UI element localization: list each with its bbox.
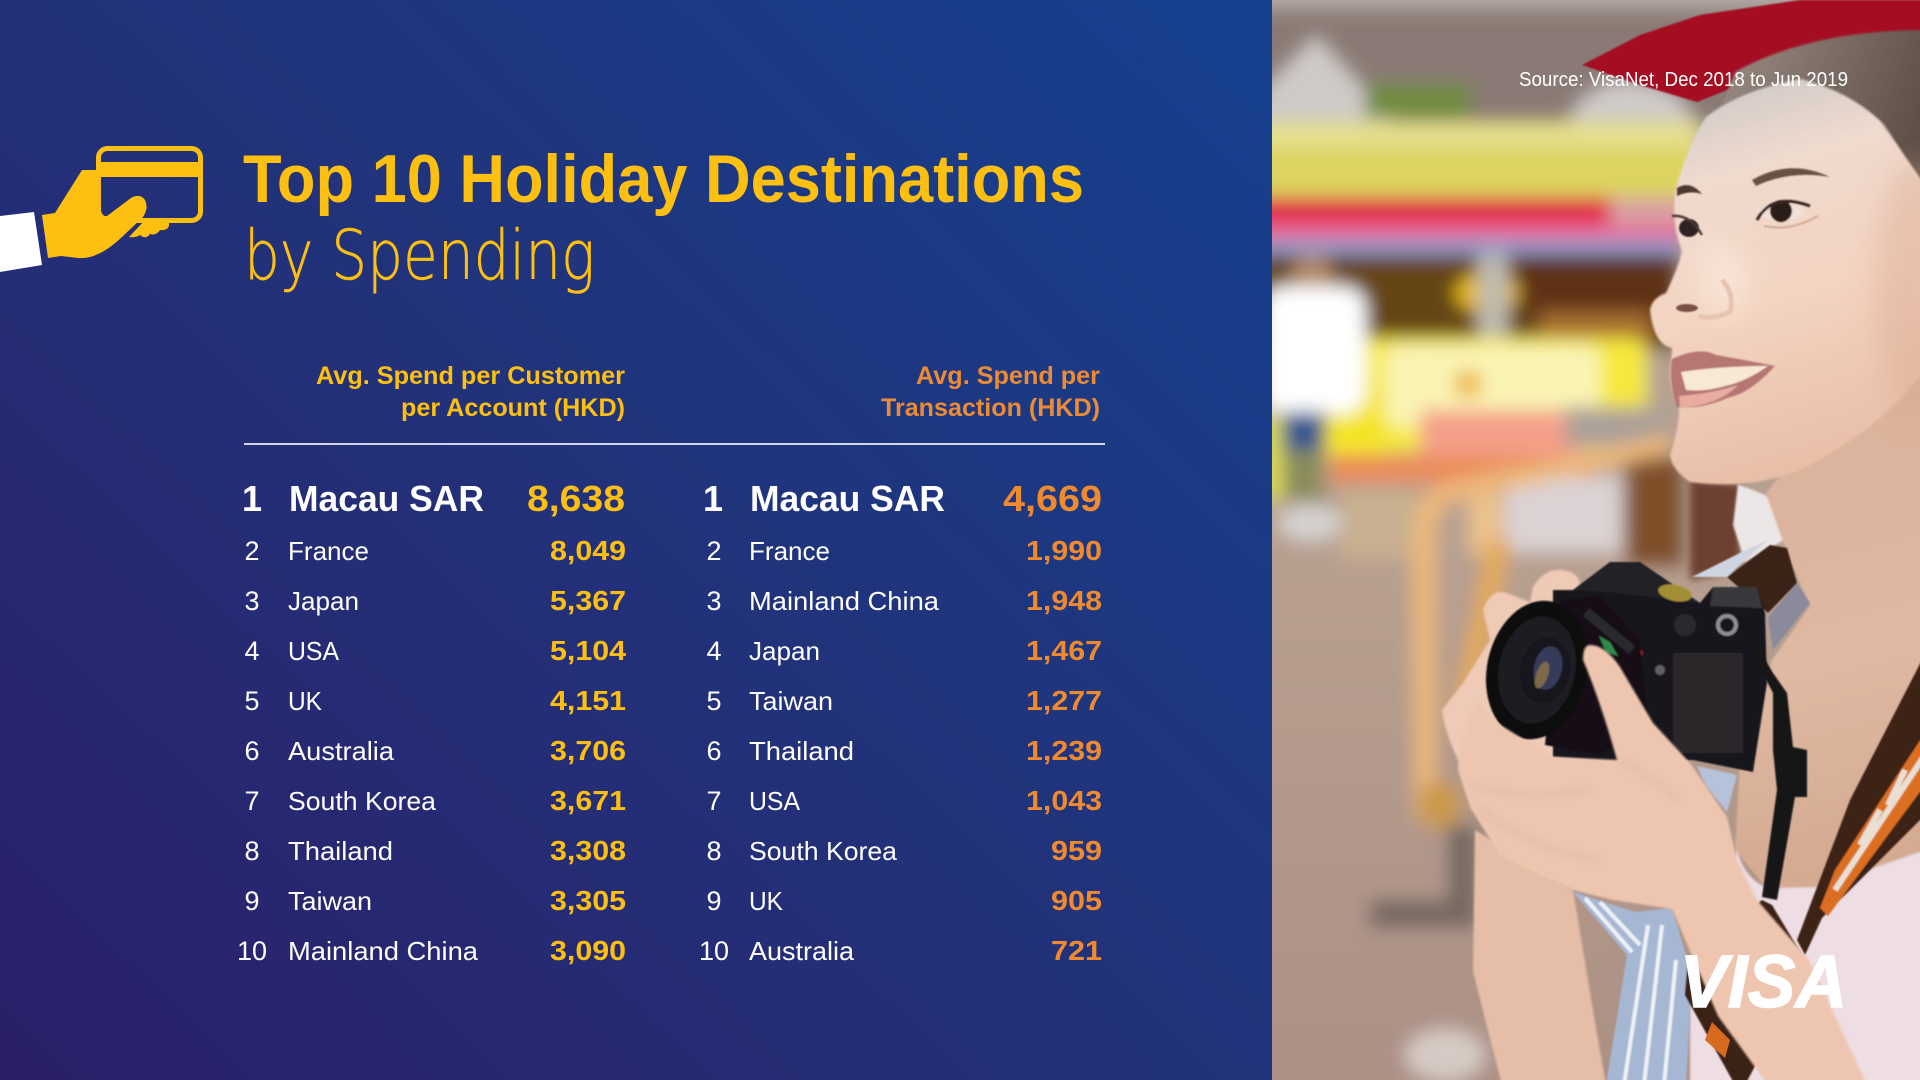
row 2 bbox=[244, 535, 626, 566]
row 2: France bbox=[749, 536, 830, 566]
row 2: 1,990 bbox=[1026, 535, 1102, 566]
row 9: 905 bbox=[1051, 885, 1102, 916]
row 1 bbox=[703, 478, 1102, 519]
photo: barrier and sign bbox=[1565, 407, 1665, 447]
photo: neck and chest bbox=[1734, 376, 1920, 888]
panel: blue gradient background bbox=[0, 0, 1272, 1080]
row 1: Macau SAR bbox=[289, 478, 484, 519]
row 5: 5 bbox=[244, 686, 260, 716]
row 1 bbox=[242, 478, 625, 519]
icon: fingers under card bbox=[129, 218, 169, 237]
row 8: 959 bbox=[1051, 835, 1102, 866]
row 9: 9 bbox=[706, 886, 722, 916]
row 4: 1,467 bbox=[1026, 635, 1102, 666]
row 8 bbox=[244, 835, 626, 866]
panel: photo of woman with camera bbox=[1230, 0, 1920, 1080]
photo: black camera strap bbox=[1761, 658, 1808, 901]
row 7 bbox=[706, 785, 1102, 816]
row 6 bbox=[244, 735, 626, 766]
photo: blurred market background bbox=[1230, 0, 1920, 1080]
photo: striped scarf lower bbox=[1573, 892, 1692, 1080]
photo: white top bbox=[1690, 850, 1920, 1080]
row 6: 6 bbox=[706, 736, 722, 766]
row 6: 6 bbox=[244, 736, 260, 766]
photo: scarf under camera bbox=[1697, 766, 1737, 812]
row 5: 5 bbox=[706, 686, 722, 716]
row 4: Japan bbox=[749, 636, 820, 666]
logo: VISA: VISA bbox=[1680, 940, 1847, 1023]
row 7: 1,043 bbox=[1026, 785, 1102, 816]
row 5: Taiwan bbox=[749, 686, 833, 716]
photo: camera bbox=[1474, 562, 1767, 772]
row 1: Macau SAR bbox=[750, 478, 945, 519]
row 2: 2 bbox=[244, 536, 260, 566]
row 3: 5,367 bbox=[550, 585, 626, 616]
row 3: 3 bbox=[706, 586, 722, 616]
row 1: 8,638 bbox=[527, 478, 625, 519]
camera grip bbox=[1673, 653, 1743, 753]
row 10: Mainland China bbox=[288, 936, 479, 966]
camera body bbox=[1553, 562, 1767, 772]
row 10: 10 bbox=[237, 936, 267, 966]
icon: hand holding credit card bbox=[0, 148, 202, 272]
photo: dark stall interior bbox=[1230, 255, 1680, 350]
row 4 bbox=[244, 635, 626, 666]
photo: scarf highlight behind chin bbox=[1733, 484, 1784, 562]
row 3: Japan bbox=[288, 586, 359, 616]
row 9: 3,305 bbox=[550, 885, 626, 916]
title line: light: by Spending bbox=[244, 216, 595, 296]
row 4: 4 bbox=[244, 636, 260, 666]
row 6: 3,706 bbox=[550, 735, 626, 766]
row 9 bbox=[244, 885, 626, 916]
photo: facial features bbox=[1671, 160, 1920, 420]
row 10: Australia bbox=[749, 936, 855, 966]
row 1: 1 bbox=[703, 478, 723, 519]
row 10: 721 bbox=[1051, 935, 1102, 966]
photo: front hand and right forearm bbox=[1458, 645, 1867, 1080]
row 3: 3 bbox=[244, 586, 260, 616]
photo: hand creases bbox=[1470, 760, 1680, 860]
column heading: transaction spend: Transaction (HKD) bbox=[881, 394, 1100, 422]
row 8: 8 bbox=[706, 836, 722, 866]
row 8: Thailand bbox=[288, 836, 393, 866]
row 5: 4,151 bbox=[550, 685, 626, 716]
row 1: 1 bbox=[242, 478, 262, 519]
column heading: transaction spend: Avg. Spend per bbox=[916, 362, 1100, 390]
row 5: 1,277 bbox=[1026, 685, 1102, 716]
row 6: Australia bbox=[288, 736, 395, 766]
row 10 bbox=[237, 935, 626, 966]
row 5: UK bbox=[288, 686, 323, 716]
row 10 bbox=[699, 935, 1102, 966]
row 7: 7 bbox=[706, 786, 722, 816]
row 8: 3,308 bbox=[550, 835, 626, 866]
row 10: 10 bbox=[699, 936, 729, 966]
row 6 bbox=[706, 735, 1102, 766]
row 8 bbox=[706, 835, 1102, 866]
row 7: 7 bbox=[244, 786, 260, 816]
source note: Source: VisaNet, Dec 2018 to Jun 2019 bbox=[1519, 69, 1848, 91]
column heading: customer spend: per Account (HKD) bbox=[401, 394, 625, 422]
row 6: 1,239 bbox=[1026, 735, 1102, 766]
icon: hand bbox=[42, 170, 147, 258]
title line: bold: Top 10 Holiday Destinations bbox=[243, 141, 1084, 217]
row 3 bbox=[244, 585, 626, 616]
photo: face bbox=[1650, 79, 1920, 484]
row 7: USA bbox=[749, 786, 801, 816]
photo: back hand and fingers bbox=[1441, 568, 1580, 763]
table: avg spend per transaction bbox=[699, 478, 1102, 966]
camera lens bbox=[1484, 600, 1587, 740]
photo: dark area behind neck bbox=[1690, 478, 1742, 580]
photo: red umbrella bbox=[1582, 0, 1920, 102]
row 3: Mainland China bbox=[749, 586, 940, 616]
row 8: South Korea bbox=[749, 836, 898, 866]
row 8: 8 bbox=[244, 836, 260, 866]
row 3: 1,948 bbox=[1026, 585, 1102, 616]
row 2: 2 bbox=[706, 536, 722, 566]
row 5 bbox=[706, 685, 1102, 716]
column heading: customer spend bbox=[316, 362, 625, 422]
row 9: Taiwan bbox=[288, 886, 372, 916]
camera lens barrel bbox=[1545, 596, 1648, 755]
photo: scarf at neck bbox=[1692, 540, 1810, 650]
row 9: 9 bbox=[244, 886, 260, 916]
row 4 bbox=[706, 635, 1102, 666]
row 10: 3,090 bbox=[550, 935, 626, 966]
title bbox=[243, 141, 1084, 296]
icon: credit card bbox=[98, 148, 202, 220]
row 6: Thailand bbox=[749, 736, 854, 766]
row 4: 5,104 bbox=[550, 635, 626, 666]
row 2: 8,049 bbox=[550, 535, 626, 566]
row 7: South Korea bbox=[288, 786, 437, 816]
row 2: France bbox=[288, 536, 369, 566]
row 2 bbox=[706, 535, 1102, 566]
row 5 bbox=[244, 685, 626, 716]
row 7 bbox=[244, 785, 626, 816]
row 4: USA bbox=[288, 636, 340, 666]
table: avg spend per customer per account bbox=[237, 478, 626, 966]
photo: left forearm bbox=[1473, 830, 1606, 1080]
row 1: 4,669 bbox=[1003, 478, 1102, 519]
photo: brown patterned strap bbox=[1797, 654, 1920, 955]
row 9: UK bbox=[749, 886, 784, 916]
row 4: 4 bbox=[706, 636, 722, 666]
column heading: customer spend: Avg. Spend per Customer bbox=[316, 362, 625, 390]
row 7: 3,671 bbox=[550, 785, 626, 816]
photo: stall goods bbox=[1325, 338, 1647, 452]
photo: hair bbox=[1722, 30, 1920, 190]
photo: lower strap bbox=[1685, 900, 1805, 1080]
row 3 bbox=[706, 585, 1102, 616]
column heading: transaction spend bbox=[881, 362, 1100, 422]
photo: blurred person bbox=[1291, 254, 1333, 296]
icon: white shirt cuff bbox=[0, 212, 42, 272]
row 9 bbox=[706, 885, 1102, 916]
